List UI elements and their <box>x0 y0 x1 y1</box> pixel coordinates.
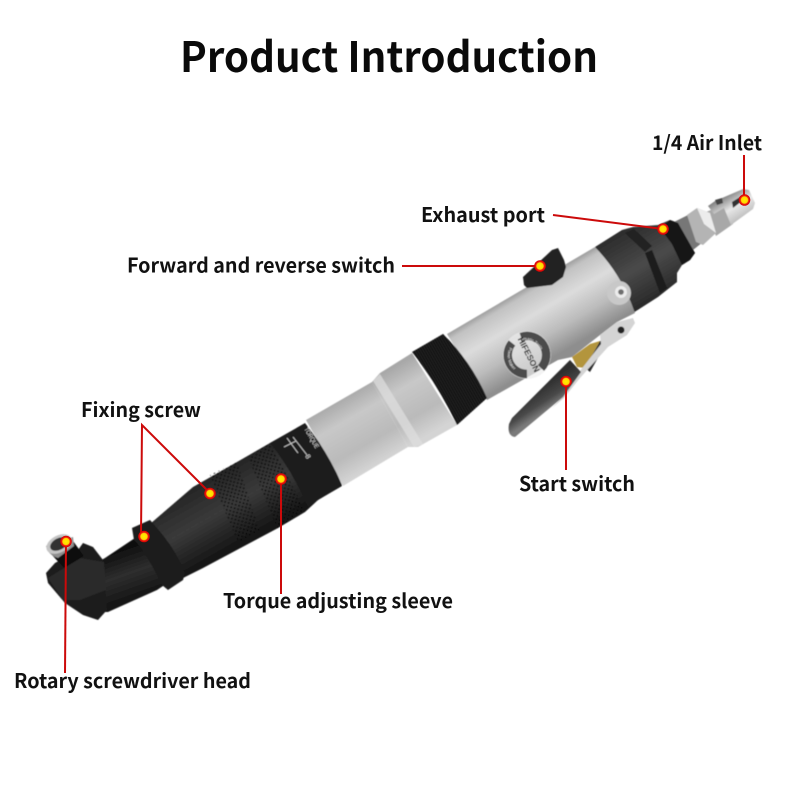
torque scale marks: 8 <box>303 454 311 460</box>
angled head <box>43 530 107 620</box>
neck <box>98 530 175 612</box>
silver main body <box>447 247 635 400</box>
rear black housing <box>595 220 695 313</box>
exhaust end cap <box>660 220 695 265</box>
callout: Start switch: Start switch <box>519 468 635 497</box>
brand logo: Pneumatic Tools <box>522 337 543 350</box>
callout: Torque adjusting sleeve <box>223 473 453 614</box>
brand logo: HIFESON <box>516 335 542 374</box>
callout: Torque adjusting sleeve: Torque adjusting sleeve <box>223 585 453 614</box>
grip body <box>150 423 342 582</box>
callout: Forward and reverse switch: Forward and reverse switch <box>127 250 395 278</box>
torque scale marks: TORQUE <box>302 426 320 450</box>
air connector <box>674 189 755 254</box>
callout: 1/4 Air Inlet: 1/4 Air Inlet <box>652 127 763 156</box>
callout: Forward and reverse switch <box>127 250 546 278</box>
brand logo: Power Maker <box>506 347 516 370</box>
callout: Exhaust port <box>421 199 669 235</box>
scale ring <box>270 424 342 507</box>
glossy housing band <box>645 250 667 293</box>
title: Product Introduction <box>180 24 598 85</box>
direction switch <box>523 248 566 288</box>
product illustration: pneumatic screwdriver <box>45 188 756 621</box>
callout: Start switch <box>519 376 635 497</box>
callout: Rotary screwdriver head <box>14 536 251 694</box>
callout: Fixing screw: Fixing screw <box>81 394 201 423</box>
retaining collar <box>132 520 185 590</box>
torque adjusting knurled sleeve <box>210 443 305 543</box>
torque scale marks <box>284 426 320 460</box>
mid silver sleeve <box>372 353 457 447</box>
callout: Rotary screwdriver head: Rotary screwdriver head <box>14 665 251 694</box>
brand logo <box>503 331 552 380</box>
air hole screw plate <box>607 281 631 305</box>
trigger lever <box>509 318 635 437</box>
callout: Exhaust port: Exhaust port <box>421 199 546 228</box>
callout: Fixing screw <box>81 394 216 542</box>
callout: 1/4 Air Inlet <box>652 127 763 206</box>
black ribbed collar <box>412 334 487 425</box>
